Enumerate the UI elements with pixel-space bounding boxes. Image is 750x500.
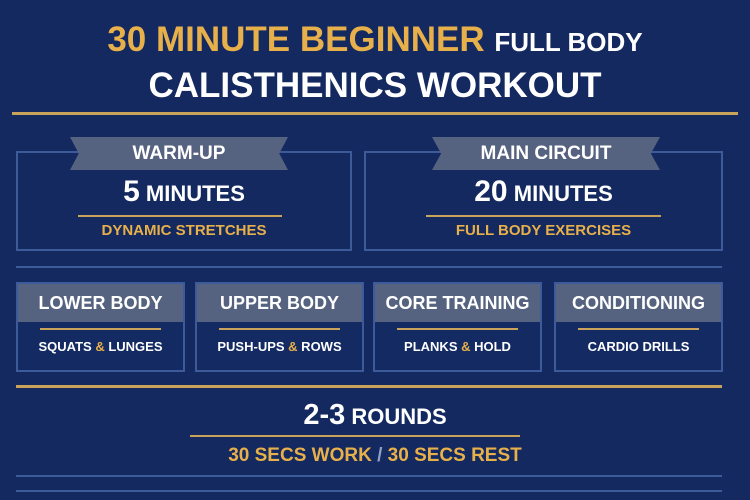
text: work/rest: 30 SECS WORK / 30 SECS REST bbox=[228, 445, 522, 466]
text: 20 minutes: 20 MINUTES bbox=[474, 175, 613, 208]
card: upper body: UPPER BODY bbox=[220, 293, 339, 313]
text: 5 minutes: 5 MINUTES bbox=[123, 175, 245, 208]
ribbon: main circuit: MAIN CIRCUIT bbox=[481, 143, 611, 164]
title bbox=[107, 20, 643, 105]
panel: main circuit bbox=[364, 151, 723, 251]
card: lower body: SQUATS & LUNGES bbox=[38, 339, 162, 354]
ribbon: warm-up bbox=[70, 137, 288, 170]
panel: warm-up bbox=[16, 151, 352, 251]
card: core training bbox=[373, 282, 542, 372]
title: CALISTHENICS WORKOUT bbox=[148, 66, 602, 105]
text: full body exercises: FULL BODY EXERCISES bbox=[456, 222, 631, 239]
card: lower body bbox=[16, 282, 185, 372]
ribbon: main circuit bbox=[432, 137, 660, 170]
text: dynamic stretches: DYNAMIC STRETCHES bbox=[101, 222, 266, 239]
card: upper body: PUSH-UPS & ROWS bbox=[217, 339, 342, 354]
card: conditioning bbox=[554, 282, 723, 372]
card: conditioning: CARDIO DRILLS bbox=[588, 339, 689, 354]
title: 30 MINUTE BEGINNER FULL BODY bbox=[107, 20, 643, 59]
card: lower body: LOWER BODY bbox=[38, 293, 162, 313]
card: core training: PLANKS & HOLD bbox=[404, 339, 511, 354]
card: core training: CORE TRAINING bbox=[386, 293, 530, 313]
text: rounds: 2-3 ROUNDS bbox=[303, 399, 447, 431]
ribbon: warm-up: WARM-UP bbox=[133, 143, 225, 164]
card: upper body bbox=[195, 282, 364, 372]
card: conditioning: CONDITIONING bbox=[572, 293, 705, 313]
